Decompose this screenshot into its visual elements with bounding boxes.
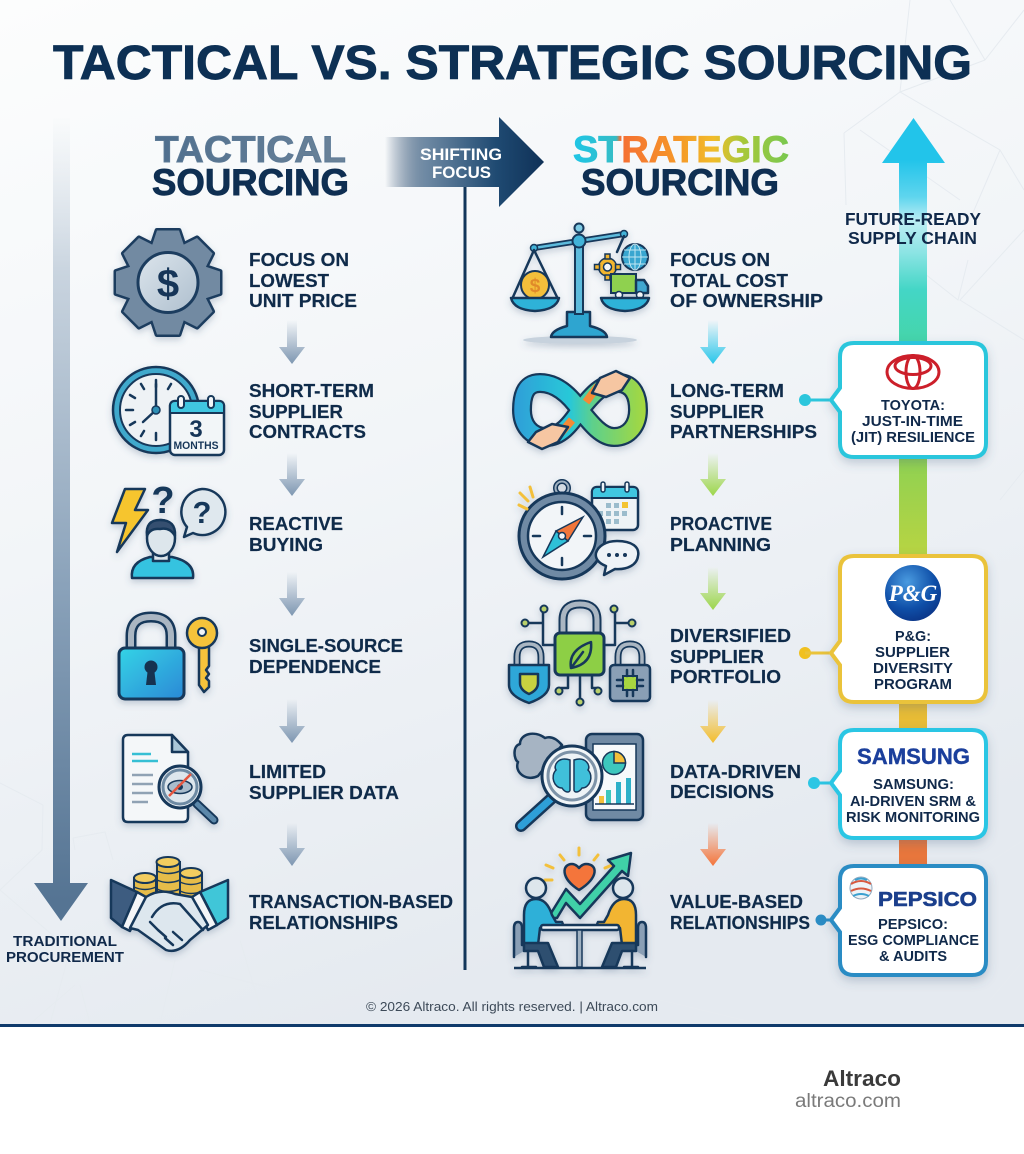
- tactical step labels: CONTRACTS: [249, 421, 366, 442]
- icon: lightning, person and question: [112, 480, 225, 578]
- arrow: future-ready upward gradient: [882, 118, 945, 868]
- callout: p&g: SUPPLIER: [875, 644, 950, 661]
- heading: tactical sourcing: TACTICAL: [155, 129, 346, 170]
- tactical step labels: FOCUS ON: [249, 249, 349, 270]
- tactical step labels: [249, 249, 453, 933]
- strategic step labels: PORTFOLIO: [670, 666, 781, 687]
- arrow: traditional procurement downward: [34, 118, 88, 921]
- strategic step labels: PROACTIVE: [670, 513, 772, 534]
- callout: toyota: [799, 343, 986, 457]
- label: traditional procurement: PROCUREMENT: [6, 949, 124, 966]
- label: traditional procurement: [6, 933, 124, 966]
- strategic step labels: TOTAL COST: [670, 270, 789, 291]
- strategic step labels: VALUE-BASED: [670, 891, 803, 912]
- label: future-ready supply chain: SUPPLY CHAIN: [848, 228, 977, 248]
- strategic step labels: DIVERSIFIED: [670, 625, 791, 646]
- heading: strategic sourcing: [573, 129, 789, 203]
- brand block: Altraco: [823, 1066, 901, 1091]
- icon: balance scale: [511, 224, 649, 344]
- tactical step labels: DEPENDENCE: [249, 656, 381, 677]
- callout: toyota: JUST-IN-TIME: [862, 413, 963, 430]
- callout: pepsico: PEPSICO:: [878, 916, 948, 933]
- callout: pepsico: ESG COMPLIANCE: [848, 932, 979, 949]
- icon: clock and calendar: 3: [189, 416, 203, 443]
- heading: tactical sourcing: [152, 129, 349, 203]
- icon: gear with dollar: [116, 230, 220, 334]
- callout: pepsico: & AUDITS: [879, 948, 947, 965]
- callout: toyota: TOYOTA:: [881, 397, 945, 414]
- icon: brain, magnifier and tablet: [514, 734, 643, 826]
- strategic step labels: PARTNERSHIPS: [670, 421, 817, 442]
- logo: toyota: [887, 356, 939, 388]
- icon: lightning, person and question: ?: [193, 495, 211, 530]
- icon: infinity with handshakes: [522, 371, 638, 449]
- tactical step labels: UNIT PRICE: [249, 290, 357, 311]
- heading: strategic sourcing: STRATEGIC: [573, 129, 789, 170]
- icon: lightning, person and question: ?: [151, 480, 175, 522]
- strategic step labels: PLANNING: [670, 534, 771, 555]
- tactical step labels: REACTIVE: [249, 513, 343, 534]
- icon: clock and calendar: [113, 367, 224, 455]
- strategic step labels: SUPPLIER: [670, 646, 764, 667]
- callout: samsung: [808, 730, 986, 838]
- strategic step labels: FOCUS ON: [670, 249, 770, 270]
- tactical step labels: LIMITED: [249, 761, 326, 782]
- logo: p&g: [885, 565, 941, 621]
- strategic step labels: DATA-DRIVEN: [670, 761, 801, 782]
- icon: clock and calendar: MONTHS: [174, 440, 218, 452]
- icon: gear with dollar: $: [157, 262, 179, 306]
- icon: padlock and key: [119, 617, 217, 699]
- logo: pepsico: [850, 877, 977, 911]
- arrows: strategic column: [700, 320, 726, 866]
- callout: p&g: [799, 556, 986, 702]
- icon: people with heart and growth: [514, 848, 646, 968]
- brand block: [795, 1066, 901, 1112]
- label: future-ready supply chain: FUTURE-READY: [845, 209, 981, 229]
- arrow: shifting focus: [385, 117, 544, 207]
- footer divider band: [0, 1024, 1024, 1027]
- tactical step labels: SINGLE-SOURCE: [249, 635, 403, 656]
- strategic step labels: DECISIONS: [670, 781, 774, 802]
- tactical step labels: RELATIONSHIPS: [249, 912, 398, 933]
- callout: pepsico: [816, 866, 986, 975]
- icon: handshake with coins: [111, 857, 228, 951]
- tactical step labels: SUPPLIER: [249, 401, 343, 422]
- brand block: altraco.com: [795, 1091, 901, 1112]
- arrows: tactical column: [279, 320, 305, 866]
- tactical step labels: SHORT-TERM: [249, 380, 374, 401]
- callout: samsung: RISK MONITORING: [846, 809, 980, 826]
- callout: toyota: (JIT) RESILIENCE: [851, 429, 975, 446]
- heading: tactical sourcing: SOURCING: [152, 162, 349, 203]
- arrow: shifting focus: SHIFTING: [420, 145, 502, 164]
- main title: TACTICAL VS. STRATEGIC SOURCING: [53, 37, 972, 90]
- tactical step labels: LOWEST: [249, 270, 330, 291]
- callout: p&g: DIVERSITY: [873, 660, 953, 677]
- strategic step labels: [670, 249, 823, 933]
- callout: samsung: AI-DRIVEN SRM &: [850, 793, 976, 810]
- strategic step labels: RELATIONSHIPS: [670, 912, 810, 933]
- icon: balance scale: $: [530, 276, 541, 297]
- strategic step labels: OF OWNERSHIP: [670, 290, 823, 311]
- callout: samsung: SAMSUNG:: [873, 776, 954, 793]
- icon: compass, calendar and chat: [519, 482, 638, 579]
- strategic step labels: LONG-TERM: [670, 380, 784, 401]
- callout: p&g: P&G:: [895, 628, 931, 645]
- callout: p&g: PROGRAM: [874, 676, 952, 693]
- label: traditional procurement: TRADITIONAL: [13, 933, 117, 950]
- center divider line: [464, 187, 466, 970]
- logo: pepsico: PEPSICO: [878, 889, 977, 911]
- tactical step labels: BUYING: [249, 534, 323, 555]
- logo: p&g: P&G: [888, 581, 938, 606]
- arrow: shifting focus: FOCUS: [432, 163, 491, 182]
- copyright line: © 2026 Altraco. All rights reserved. | Altraco.com: [366, 1000, 658, 1014]
- heading: strategic sourcing: SOURCING: [581, 162, 779, 203]
- tactical step labels: SUPPLIER DATA: [249, 782, 399, 803]
- strategic step labels: SUPPLIER: [670, 401, 764, 422]
- icon: locks with circuit: [509, 604, 650, 706]
- tactical step labels: TRANSACTION-BASED: [249, 891, 453, 912]
- logo: samsung: SAMSUNG: [857, 744, 970, 769]
- icon: document and magnifier: [123, 735, 214, 822]
- label: future-ready supply chain: [845, 209, 981, 248]
